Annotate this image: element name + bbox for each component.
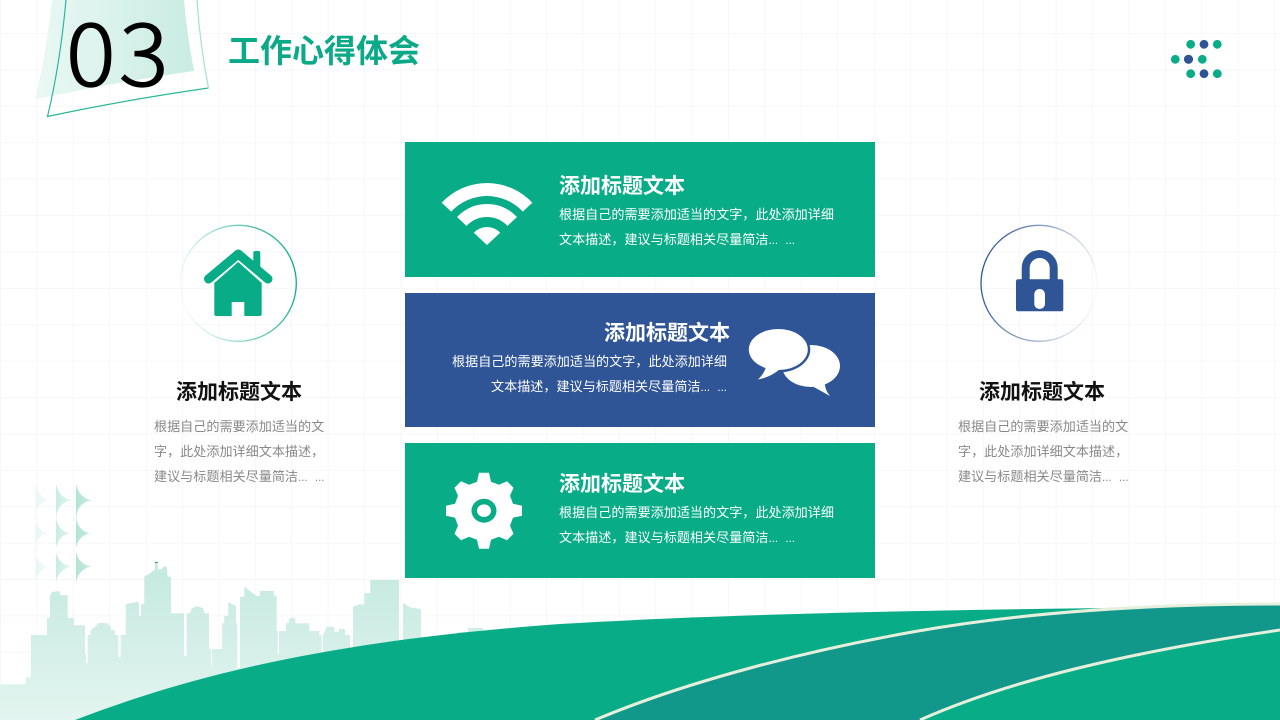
panel: right feature bbox=[958, 224, 1128, 484]
text: left feature: 根据自己的需要添加适当的文 字，此处添加详细文本描述， 建议与标题相关尽量简洁... ... bbox=[154, 418, 324, 484]
text: card chat: 根据自己的需要添加适当的文字，此处添加详细 文本描述，建议与标题相关尽量简洁... ... bbox=[452, 354, 727, 394]
panel: left feature bbox=[154, 224, 324, 484]
title: 工作心得体会 bbox=[228, 33, 420, 69]
heading: card chat: 添加标题文本 bbox=[604, 322, 730, 345]
heading: card gear: 添加标题文本 bbox=[559, 473, 685, 496]
panel: card chat bbox=[405, 293, 875, 427]
panel: card gear bbox=[405, 443, 875, 578]
text: card gear: 根据自己的需要添加适当的文字，此处添加详细 文本描述，建议与标题相关尽量简洁... ... bbox=[559, 504, 834, 544]
panel: card wifi bbox=[405, 142, 875, 277]
heading: right feature: 添加标题文本 bbox=[979, 381, 1105, 404]
text: right feature: 根据自己的需要添加适当的文 字，此处添加详细文本描述， 建议与标题相关尽量简洁... ... bbox=[958, 418, 1128, 484]
heading: left feature: 添加标题文本 bbox=[176, 381, 302, 404]
heading: card wifi: 添加标题文本 bbox=[559, 175, 685, 198]
text: card wifi: 根据自己的需要添加适当的文字，此处添加详细 文本描述，建议与标题相关尽量简洁... ... bbox=[559, 206, 834, 246]
